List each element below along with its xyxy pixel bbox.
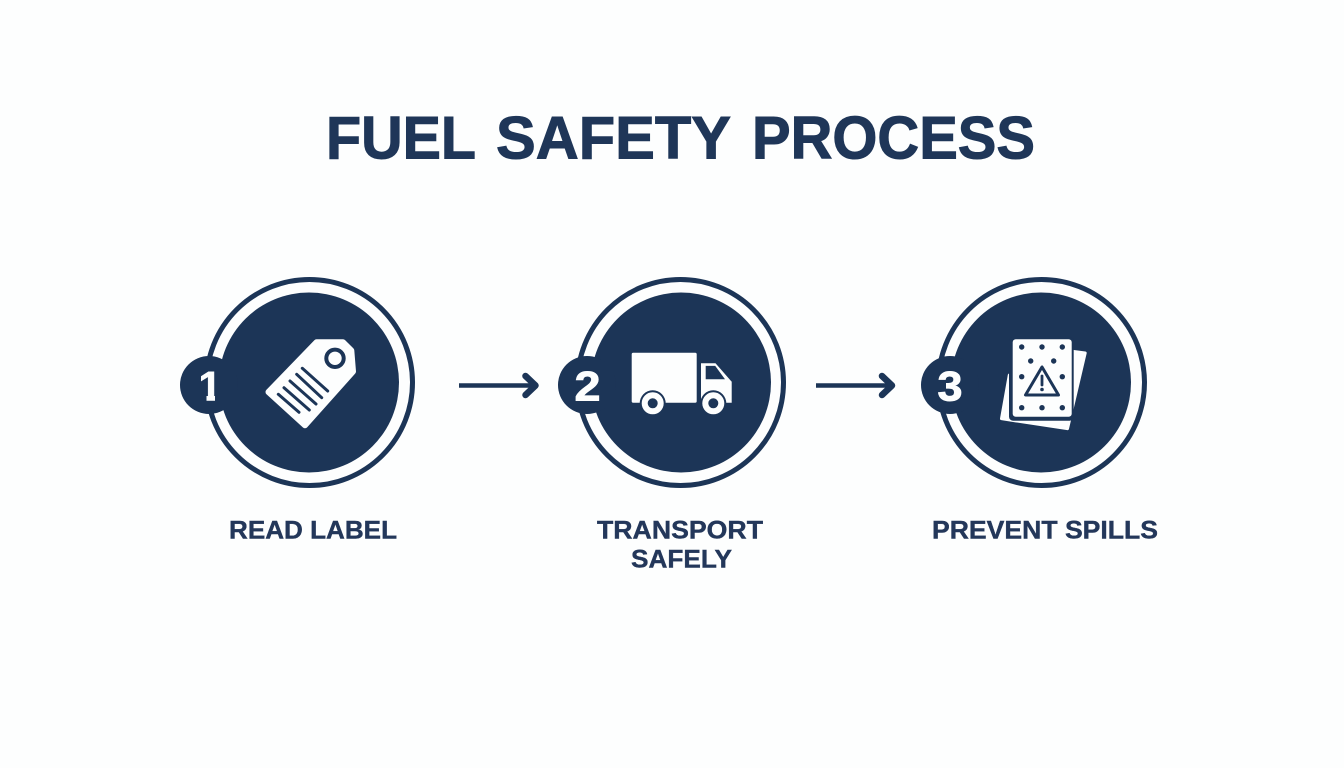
step 1: read label: [180, 280, 412, 544]
step 2: transport safely: [558, 280, 784, 574]
label: prevent spills: PREVENT SPILLS: [932, 516, 1158, 544]
label: read label: READ LABEL: [229, 516, 397, 544]
step 2 ring and disc: [578, 280, 784, 486]
title: [326, 104, 1035, 172]
title: FUEL: [326, 104, 476, 172]
label: transport safely: TRANSPORT: [597, 516, 763, 544]
number badge 1: 1: [198, 362, 222, 410]
icon: fuel label tag: [268, 342, 353, 425]
arrow 2 to 3: [816, 376, 892, 395]
number badge 2: 2: [574, 362, 600, 410]
number badge 3: [921, 356, 979, 414]
title: PROCESS: [752, 104, 1035, 172]
number badge 1: [180, 356, 238, 414]
title: SAFETY: [496, 104, 731, 172]
number badge 2: [558, 356, 616, 414]
label: transport safely: SAFELY: [631, 546, 732, 574]
step 1 ring and disc: [206, 280, 412, 486]
label: transport safely: [597, 516, 763, 574]
icon: absorbent spill pads with warning: [1002, 337, 1085, 429]
step 3: prevent spills: [921, 280, 1158, 544]
icon: delivery truck: [632, 353, 732, 416]
arrow 1 to 2: [459, 376, 536, 395]
number badge 3: 3: [938, 362, 962, 410]
step 3 ring and disc: [938, 280, 1144, 486]
